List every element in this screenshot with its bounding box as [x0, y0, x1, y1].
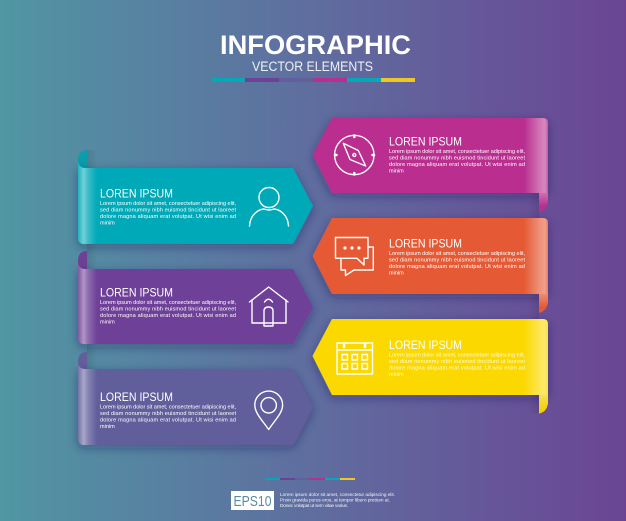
panel: teal arrow	[78, 150, 313, 244]
body text: dolore magna aliquam erat volutpat. Ut wisi enim ad	[389, 366, 525, 372]
body text: Lorem ipsum dolor sit amet, consectetuer adipiscing elit,	[389, 352, 525, 358]
heading: LOREN IPSUM	[100, 391, 173, 404]
body text: dolore magna aliquam erat volutpat. Ut wisi enim ad	[100, 418, 236, 424]
icon: compass	[335, 135, 374, 175]
panel: slate arrow	[78, 352, 313, 445]
fold tab	[539, 395, 548, 414]
body text: sed diam nonummy nibh euismod tincidunt ut laoreet	[389, 359, 525, 365]
panel: yellow arrow	[312, 319, 548, 414]
body text	[100, 300, 236, 326]
body text: Lorem ipsum dolor sit amet, consectetuer adipiscing elit,	[100, 300, 236, 306]
icon: chat bubbles	[336, 238, 373, 276]
body text: sed diam nonummy nibh euismod tincidunt ut laoreet	[389, 258, 525, 264]
body text	[389, 251, 525, 276]
body text: minim	[389, 168, 404, 174]
body text: sed diam nonummy nibh euismod tincidunt ut laoreet	[389, 156, 525, 162]
fold tab	[539, 193, 548, 212]
heading: LOREN IPSUM	[100, 287, 173, 300]
body text: dolore magna aliquam erat volutpat. Ut wisi enim ad	[100, 313, 236, 319]
footer text	[280, 492, 395, 509]
body text: sed diam nonummy nibh euismod tincidunt ut laoreet	[100, 306, 236, 312]
body text: Lorem ipsum dolor sit amet, consectetuer adipiscing elit,	[100, 201, 236, 207]
icon: house	[250, 287, 288, 326]
footer text: Proin gravida purus eros, at tempor libero pretium at.	[280, 498, 390, 504]
body text	[100, 201, 236, 226]
panel: orange arrow	[312, 218, 548, 313]
footer	[231, 478, 395, 510]
panel: magenta arrow	[312, 118, 548, 212]
heading: LOREN IPSUM	[389, 237, 462, 250]
body text	[389, 352, 525, 378]
body text	[389, 149, 525, 174]
footer text: Lorem ipsum dolor sit amet, consectetur adipiscing elit.	[280, 492, 395, 498]
heading: LOREN IPSUM	[389, 339, 462, 352]
footer text: Donec volutpat ut sem vitae varius.	[280, 503, 348, 509]
body text: minim	[100, 220, 115, 226]
body text	[100, 405, 236, 430]
body text: Lorem ipsum dolor sit amet, consectetuer adipiscing elit,	[389, 149, 525, 155]
body text: Lorem ipsum dolor sit amet, consectetuer adipiscing elit,	[100, 405, 236, 411]
EPS10 badge: EPS10	[234, 493, 272, 510]
title: INFOGRAPHIC	[220, 30, 411, 60]
heading: LOREN IPSUM	[389, 135, 462, 148]
body text: dolore magna aliquam erat volutpat. Ut wisi enim ad	[389, 162, 525, 168]
body text: minim	[389, 270, 404, 276]
subtitle: VECTOR ELEMENTS	[252, 59, 373, 74]
heading: LOREN IPSUM	[100, 188, 173, 200]
body text: sed diam nonummy nibh euismod tincidunt ut laoreet	[100, 208, 236, 214]
icon: calendar	[337, 343, 372, 374]
body text: dolore magna aliquam erat volutpat. Ut wisi enim ad	[100, 214, 236, 220]
body text: minim	[100, 424, 115, 430]
panel: purple arrow	[78, 251, 313, 344]
body text: minim	[389, 372, 404, 378]
fold tab	[539, 294, 548, 313]
icon: map pin	[255, 391, 283, 430]
small colour bar	[265, 478, 355, 480]
title block	[211, 30, 415, 82]
body text: Lorem ipsum dolor sit amet, consectetuer adipiscing elit,	[389, 251, 525, 257]
body text: minim	[100, 320, 115, 326]
body text: sed diam nonummy nibh euismod tincidunt ut laoreet	[100, 411, 236, 417]
icon: person	[250, 188, 288, 226]
body text: dolore magna aliquam erat volutpat. Ut wisi enim ad	[389, 264, 525, 270]
colour bar	[211, 78, 415, 82]
